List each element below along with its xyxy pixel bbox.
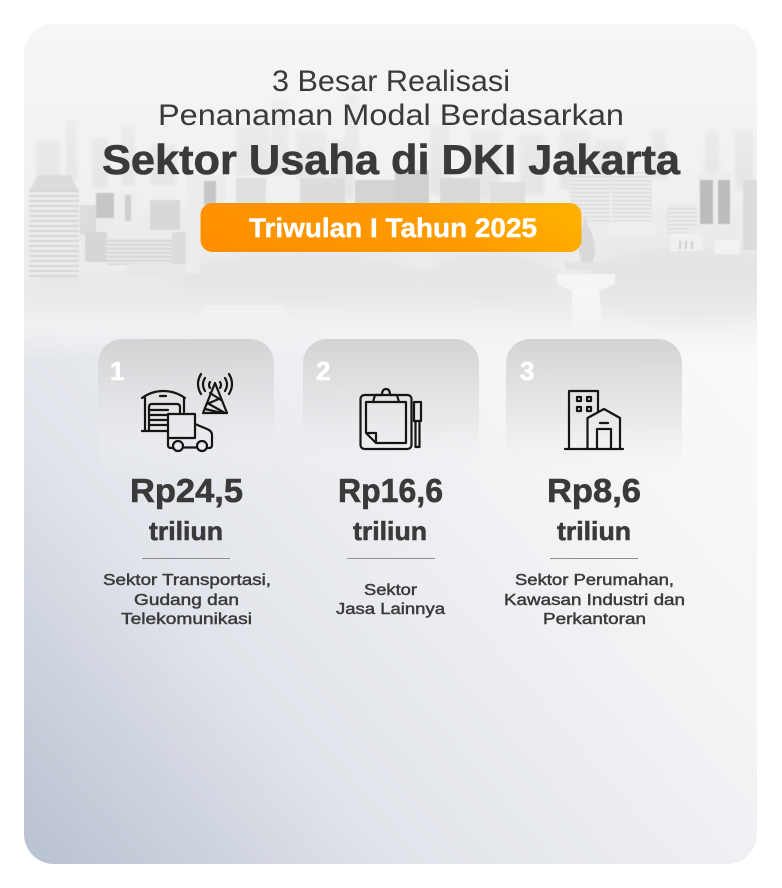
card background 3 bbox=[506, 339, 682, 477]
value 1: Rp24,5 bbox=[130, 472, 243, 509]
value 3: Rp8,6 bbox=[547, 472, 641, 509]
rank number 1: 1 bbox=[110, 356, 124, 386]
panel: sector 2 bbox=[303, 339, 479, 618]
tree canopy bbox=[176, 249, 757, 305]
monument bbox=[557, 218, 615, 310]
label 3 bbox=[504, 572, 685, 628]
label 1 bbox=[103, 572, 271, 628]
icon: clipboard and pen bbox=[360, 389, 421, 449]
rank number 3: 3 bbox=[520, 356, 534, 386]
label 2: Sektor bbox=[364, 582, 417, 599]
title line 1: 3 Besar Realisasi bbox=[272, 65, 510, 98]
panel: sector 3 bbox=[504, 339, 685, 628]
city skyline backdrop bbox=[24, 44, 757, 340]
unit 2: triliun bbox=[353, 516, 427, 546]
label 1: Sektor Transportasi, bbox=[103, 572, 271, 589]
label 3: Sektor Perumahan, bbox=[515, 572, 674, 589]
rank number 2: 2 bbox=[316, 356, 330, 386]
icon: warehouse, truck and tower bbox=[142, 374, 232, 451]
label 2 bbox=[336, 582, 445, 618]
unit 1: triliun bbox=[149, 516, 223, 546]
title bbox=[102, 65, 681, 183]
label 1: Telekomunikasi bbox=[121, 611, 252, 628]
card background 2 bbox=[303, 339, 479, 477]
period badge: Triwulan I Tahun 2025 bbox=[249, 213, 537, 243]
label 3: Perkantoran bbox=[543, 611, 646, 628]
title line 3: Sektor Usaha di DKI Jakarta bbox=[102, 136, 681, 183]
title line 2: Penanaman Modal Berdasarkan bbox=[158, 99, 624, 132]
label 3: Kawasan Industri dan bbox=[504, 592, 685, 609]
period badge bbox=[200, 203, 582, 252]
label 2: Jasa Lainnya bbox=[336, 601, 445, 618]
value 2: Rp16,6 bbox=[338, 472, 443, 509]
icon: office and house bbox=[565, 391, 623, 449]
card background 1 bbox=[98, 339, 274, 477]
label 1: Gudang dan bbox=[134, 592, 239, 609]
unit 3: triliun bbox=[557, 516, 631, 546]
panel: sector 1 bbox=[98, 339, 274, 628]
